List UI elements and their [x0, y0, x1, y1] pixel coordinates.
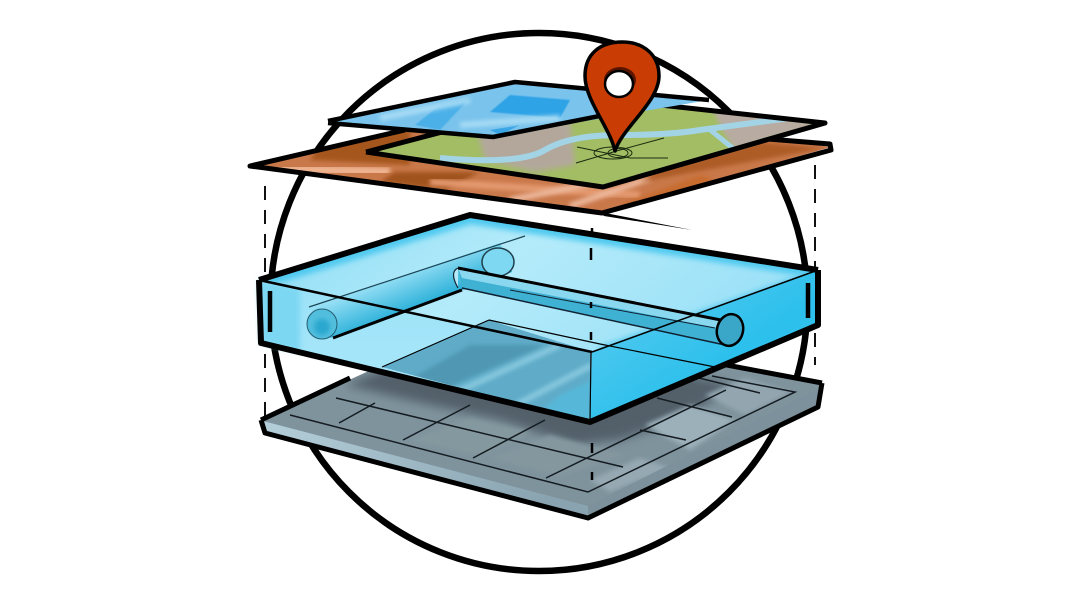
water centre dashes — [591, 228, 592, 340]
floor seen through the water — [382, 320, 592, 419]
layer: grey street grid slab — [258, 357, 824, 520]
outline circle — [270, 33, 808, 571]
layer: transparent blue water volume — [259, 215, 818, 430]
right face — [590, 270, 818, 422]
pipe: left horizontal — [307, 236, 525, 339]
pin target marks — [576, 138, 668, 163]
water edges — [259, 215, 818, 422]
top surface — [259, 215, 818, 352]
slab front edges — [263, 421, 588, 516]
left face — [259, 280, 592, 422]
layer: orange street map — [250, 128, 831, 230]
layer: blue water map — [328, 82, 709, 137]
dashed guide lines — [265, 165, 815, 420]
slab grid lines — [290, 376, 795, 492]
slab outline — [261, 360, 822, 518]
infographic: layered map illustration — [248, 30, 834, 574]
hairline tail — [600, 212, 692, 230]
slab centre dashes — [591, 443, 593, 480]
pipe: long diagonal — [454, 268, 747, 349]
icon: red location pin — [585, 42, 659, 151]
layer: green terrain map — [366, 103, 825, 187]
